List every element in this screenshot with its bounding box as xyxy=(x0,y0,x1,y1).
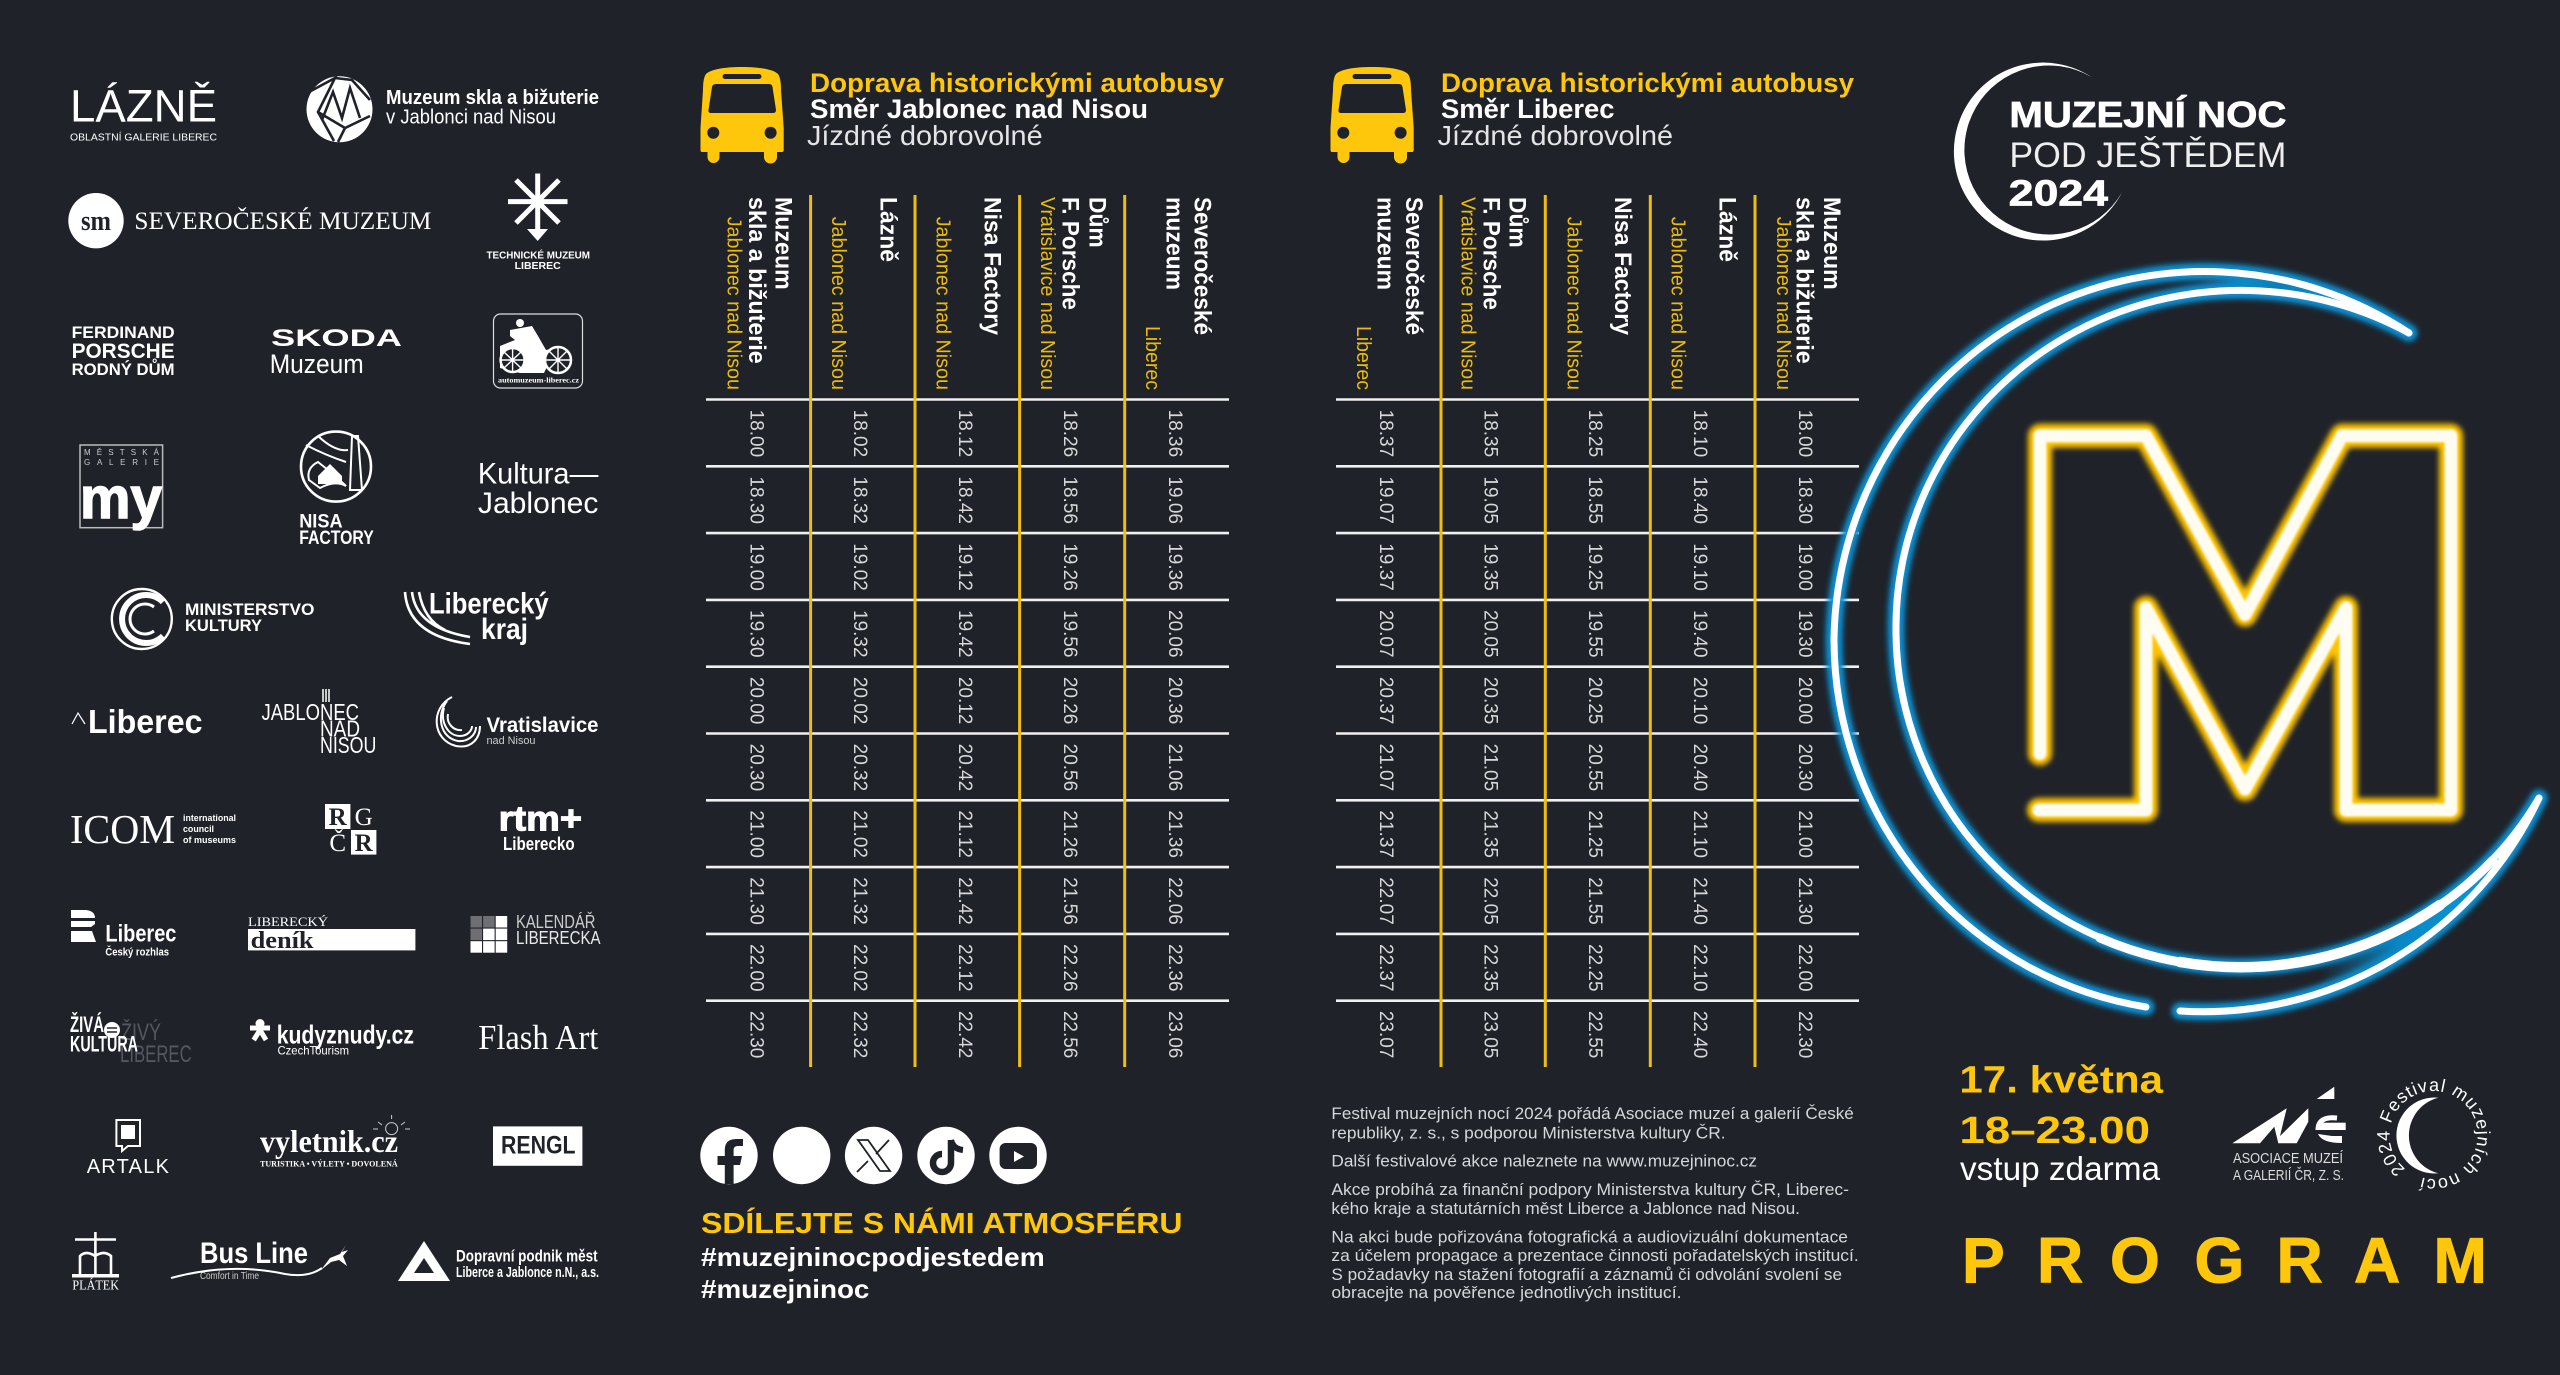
column headers: F. Porsche xyxy=(1056,197,1084,310)
departure times: 19.10 xyxy=(1689,543,1710,591)
departure times: 20.05 xyxy=(1480,610,1501,658)
departure times: 20.12 xyxy=(954,677,975,724)
logo: Bus Line: Bus Line xyxy=(200,1237,308,1270)
logo: Živá kultura, Živý Liberec xyxy=(70,1012,192,1068)
departure times: 22.06 xyxy=(1164,877,1185,925)
heading: direction Jablonec: Doprava historickými autobusy xyxy=(810,68,1224,98)
column headers: Lázně xyxy=(874,197,902,262)
text block: festival information: republiky, z. s., s podporou Ministerstva kultury ČR. xyxy=(1331,1123,1726,1142)
column headers: Jablonec nad Nisou xyxy=(1772,217,1794,390)
logo: kudyznudy.cz CzechTourism: kudyznudy.cz xyxy=(277,1020,414,1050)
logo: Automuzeum Liberec: automuzeum-liberec.cz xyxy=(498,376,580,384)
departure times: 22.55 xyxy=(1584,1011,1605,1058)
hashtags: #muzejninoc xyxy=(701,1274,869,1304)
departure times: 18.26 xyxy=(1059,410,1080,457)
departure times: 21.07 xyxy=(1375,744,1396,791)
logo: Bus Line xyxy=(171,1237,348,1282)
logo: Liberecký deník xyxy=(248,914,415,954)
departure times: 20.36 xyxy=(1164,677,1185,724)
departure times: 19.40 xyxy=(1689,610,1710,658)
column headers: Jablonec nad Nisou xyxy=(1562,217,1584,390)
departure times: 20.02 xyxy=(849,677,870,724)
logo: Plátek: PLÁTEK xyxy=(72,1276,119,1294)
logo: ICOM: ICOM xyxy=(70,806,175,852)
logo: Nisa Factory xyxy=(299,432,374,549)
departure times: 22.25 xyxy=(1584,944,1605,992)
column headers: Liberec xyxy=(1352,326,1374,390)
logo: Městská galerie MY: my xyxy=(80,466,162,531)
icon: TikTok xyxy=(917,1127,975,1184)
column headers: muzeum xyxy=(1372,197,1398,290)
panel: bus timetable towards Jablonec nad Nisou xyxy=(700,67,1229,1067)
heading: direction Jablonec xyxy=(807,68,1224,151)
logo: Český rozhlas Liberec xyxy=(71,910,176,959)
departure times: 18.00 xyxy=(745,410,766,457)
column headers: Vratislavice nad Nisou xyxy=(1456,197,1478,390)
departure times: 18.40 xyxy=(1689,476,1710,524)
departure times: 22.00 xyxy=(745,944,766,992)
logo: Technické muzeum Liberec: LIBEREC xyxy=(515,260,561,272)
logo: Kultura Jablonec xyxy=(478,458,598,520)
departure times: 18.55 xyxy=(1584,476,1605,524)
logo: ICOM: of museums xyxy=(183,835,236,846)
column headers: Dům xyxy=(1504,197,1530,248)
hashtags xyxy=(701,1242,1045,1304)
logo: RG ČR: R xyxy=(329,804,348,831)
logo: Jablonec nad Nisou: JABLONEC xyxy=(262,699,359,725)
departure times: 20.06 xyxy=(1164,610,1185,658)
heading: direction Jablonec: Směr Jablonec nad Nisou xyxy=(810,94,1148,124)
departure times: 21.32 xyxy=(849,877,870,925)
departure times: 19.55 xyxy=(1584,610,1605,658)
logo: Lázně: LÁZNĚ xyxy=(70,80,217,131)
departure times: 20.10 xyxy=(1689,677,1710,724)
neon letter M xyxy=(2039,436,2451,810)
hashtags: #muzejninocpodjestedem xyxy=(701,1242,1045,1272)
departure times: 20.35 xyxy=(1480,677,1501,724)
column headers: Muzeum xyxy=(770,197,796,290)
logo wordmark: 2024 xyxy=(2009,173,2108,214)
column headers: Jablonec nad Nisou xyxy=(1666,217,1688,390)
logo: Městská galerie MY: GALERIE xyxy=(84,458,159,467)
date and admission: 18–23.00 xyxy=(1959,1110,2150,1152)
departure times: 22.42 xyxy=(954,1011,975,1058)
logo: Asociace muzeí a galerií: ASOCIACE MUZEÍ xyxy=(2233,1150,2344,1167)
departure times: 21.26 xyxy=(1059,810,1080,858)
departure times: 18.30 xyxy=(745,476,766,524)
departure times: 18.37 xyxy=(1375,410,1396,457)
logo: Městská galerie MY: MĚSTSKÁ xyxy=(84,448,160,457)
logo wordmark: POD JEŠTĚDEM xyxy=(2009,136,2286,175)
departure times: 21.12 xyxy=(954,810,975,858)
logo: Rengl xyxy=(493,1126,582,1166)
neon crescent xyxy=(1834,267,2539,1012)
text block: festival information: za účelem propagace a prezentace činnosti pořadatelských institucí. xyxy=(1331,1247,1859,1265)
logo: Živá kultura, Živý Liberec: LIBEREC xyxy=(120,1041,192,1068)
logo: ICOM: council xyxy=(183,824,214,835)
text block: festival information: Festival muzejních nocí 2024 pořádá Asociace muzeí a galerií České xyxy=(1331,1104,1854,1123)
column headers: Severočeské xyxy=(1400,197,1427,335)
logo wordmark xyxy=(2009,94,2286,214)
departure times: 19.00 xyxy=(1794,543,1815,591)
text block: festival information: Na akci bude pořizována fotografická a audiovizuální dokumentace xyxy=(1331,1228,1848,1246)
departure times: 18.12 xyxy=(954,410,975,457)
departure times: 18.30 xyxy=(1794,476,1815,524)
logo: Technické muzeum Liberec xyxy=(486,174,590,272)
illustration: neon crescent and M xyxy=(1834,267,2539,1012)
logo: Lázně: OBLASTNÍ GALERIE LIBEREC xyxy=(70,130,217,144)
departure times: 20.07 xyxy=(1375,610,1396,658)
date and admission: vstup zdarma xyxy=(1960,1150,2161,1187)
column headers: Nisa Factory xyxy=(1609,197,1636,336)
logo: Český rozhlas Liberec: Liberec xyxy=(105,920,176,948)
logo: Kalendář Liberecka: LIBERECKA xyxy=(516,928,601,948)
logo: Bus Line: Comfort in Time xyxy=(200,1271,259,1282)
column headers: skla a bižuterie xyxy=(1790,197,1818,364)
date and admission: 17. května xyxy=(1959,1060,2164,1102)
departure times: 19.05 xyxy=(1480,476,1501,524)
departure times: 18.56 xyxy=(1059,476,1080,524)
logo: Severočeské muzeum: SEVEROČESKÉ MUZEUM xyxy=(134,207,431,235)
departure times: 21.30 xyxy=(1794,877,1815,925)
logo: Kalendář Liberecka xyxy=(470,912,601,953)
departure times: 20.56 xyxy=(1059,744,1080,791)
departure times: 19.37 xyxy=(1375,543,1396,591)
logo: Artalk xyxy=(87,1120,170,1178)
logo: Nisa Factory: NISA xyxy=(299,512,343,533)
departure times: 21.30 xyxy=(745,877,766,925)
departure times: 22.32 xyxy=(849,1011,870,1058)
logo: Jablonec nad Nisou: NAD xyxy=(320,716,360,742)
departure times: 21.05 xyxy=(1480,744,1501,791)
logo: Dopravní podnik měst Liberce a Jablonce: Liberce a Jablonce n.N., a.s. xyxy=(456,1265,599,1281)
departure times: 20.00 xyxy=(745,677,766,724)
heading: direction Liberec xyxy=(1438,68,1854,151)
departure times: 19.35 xyxy=(1480,543,1501,591)
departure times: 18.32 xyxy=(849,476,870,524)
departure times: 19.42 xyxy=(954,610,975,658)
departure times: 18.35 xyxy=(1480,410,1501,457)
departure times: 20.30 xyxy=(1794,744,1815,791)
departure times: 21.06 xyxy=(1164,744,1185,791)
logo: Ferdinand Porsche rodný dům: FERDINAND xyxy=(72,323,175,342)
logo: Liberecký deník: LIBERECKÝ xyxy=(248,914,329,929)
heading: direction Jablonec: Jízdné dobrovolné xyxy=(807,120,1043,151)
logo: ICOM xyxy=(70,806,236,852)
logo: Ministerstvo kultury: MINISTERSTVO xyxy=(185,600,314,619)
column headers: Severočeské xyxy=(1188,197,1216,335)
departure times: 18.00 xyxy=(1794,410,1815,457)
departure times: 18.25 xyxy=(1584,410,1605,457)
departure times: 22.02 xyxy=(849,944,870,992)
logo: rtm+ Liberecko: rtm+ xyxy=(499,800,582,839)
logo: Škoda muzeum: SKODA xyxy=(271,325,402,352)
departure times: 22.12 xyxy=(954,944,975,992)
logo wordmark: MUZEJNÍ NOC xyxy=(2009,94,2286,135)
heading: direction Liberec: Směr Liberec xyxy=(1441,94,1614,124)
logo: ICOM: international xyxy=(183,813,236,824)
departure times: 22.30 xyxy=(745,1011,766,1058)
logo: RG ČR xyxy=(325,804,376,857)
departure times: 23.05 xyxy=(1480,1011,1501,1058)
text block: festival information: S požadavky na stažení fotografií a záznamů či odvolání svolení se xyxy=(1331,1266,1842,1284)
departure times xyxy=(1375,410,1815,1058)
departure times: 22.40 xyxy=(1689,1011,1710,1058)
logo: Liberecký kraj: Liberecký xyxy=(429,588,549,621)
departure times: 21.10 xyxy=(1689,810,1710,858)
departure times: 20.40 xyxy=(1689,744,1710,791)
departure times: 20.00 xyxy=(1794,677,1815,724)
logo: Ministerstvo kultury: KULTURY xyxy=(185,616,263,635)
departure times: 18.10 xyxy=(1689,410,1710,457)
logo: Vratislavice nad Nisou: nad Nisou xyxy=(486,735,536,747)
logo: Flash Art: Flash Art xyxy=(478,1018,599,1057)
departure times: 21.42 xyxy=(954,877,975,925)
column headers: Liberec xyxy=(1141,326,1163,390)
logo: Severočeské muzeum: sm xyxy=(81,206,111,237)
icon: Instagram placeholder disc xyxy=(773,1127,830,1184)
logo: Škoda muzeum xyxy=(270,325,402,379)
logo: Živá kultura, Živý Liberec: KULTURA xyxy=(70,1031,138,1056)
logo: Ferdinand Porsche rodný dům xyxy=(72,323,175,379)
departure times: 19.32 xyxy=(849,610,870,658)
logo: kudyznudy.cz CzechTourism xyxy=(250,1019,414,1058)
column headers: Vratislavice nad Nisou xyxy=(1036,197,1058,390)
logo: Liberec city: Liberec xyxy=(88,703,202,740)
departure times: 20.26 xyxy=(1059,677,1080,724)
column headers: Jablonec nad Nisou xyxy=(722,217,744,390)
logo: vyletnik.cz: TURISTIKA • VÝLETY • DOVOLENÁ xyxy=(260,1159,398,1169)
logo: Muzeum skla a bižuterie xyxy=(306,76,599,142)
departure times: 22.37 xyxy=(1375,944,1396,992)
departure times: 22.10 xyxy=(1689,944,1710,992)
departure times: 18.42 xyxy=(954,476,975,524)
logo: vyletnik.cz: vyletnik.cz xyxy=(260,1123,398,1159)
departure times: 19.02 xyxy=(849,543,870,591)
departure times: 21.36 xyxy=(1164,810,1185,858)
column headers: Nisa Factory xyxy=(978,197,1006,336)
logo: Ferdinand Porsche rodný dům: RODNÝ DŮM xyxy=(72,359,175,379)
column headers: Jablonec nad Nisou xyxy=(827,217,849,390)
logo: RG ČR: Č xyxy=(329,829,346,857)
logo: Kultura Jablonec: Jablonec xyxy=(478,487,598,520)
departure times: 19.30 xyxy=(1794,610,1815,658)
departure times xyxy=(745,410,1185,1058)
column headers: F. Porsche xyxy=(1478,197,1504,310)
column headers: muzeum xyxy=(1160,197,1188,290)
departure times: 20.32 xyxy=(849,744,870,791)
crescent xyxy=(1954,63,2122,241)
logo: kudyznudy.cz CzechTourism: CzechTourism xyxy=(278,1044,349,1058)
departure times: 20.55 xyxy=(1584,744,1605,791)
departure times: 21.56 xyxy=(1059,877,1080,925)
departure times: 19.36 xyxy=(1164,543,1185,591)
logo: Nisa Factory: FACTORY xyxy=(299,528,374,549)
logo: Živá kultura, Živý Liberec: ŽIVÁ xyxy=(70,1012,104,1037)
logo: Ministerstvo kultury xyxy=(112,589,314,649)
column headers: Dům xyxy=(1084,197,1110,248)
logo: Asociace muzeí a galerií xyxy=(2232,1087,2346,1184)
departure times: 20.37 xyxy=(1375,677,1396,724)
logo: Ferdinand Porsche rodný dům: PORSCHE xyxy=(72,340,175,363)
column headers: Muzeum xyxy=(1818,197,1845,290)
heading: direction Liberec: Doprava historickými autobusy xyxy=(1441,68,1854,98)
logo: RG ČR: R xyxy=(355,830,374,857)
logo: Kalendář Liberecka: KALENDÁŘ xyxy=(516,912,595,932)
logo: Živá kultura, Živý Liberec: ŽIVÝ xyxy=(121,1019,161,1046)
logo: Liberecký kraj xyxy=(405,588,549,646)
icon: Facebook xyxy=(700,1127,758,1184)
logo: Dopravní podnik měst Liberce a Jablonce: Dopravní podnik měst xyxy=(456,1246,598,1266)
logo: Vratislavice nad Nisou: Vratislavice xyxy=(486,714,598,737)
heading: share the atmosphere: SDÍLEJTE S NÁMI ATMOSFÉRU xyxy=(701,1206,1182,1240)
departure times: 21.35 xyxy=(1480,810,1501,858)
logo: Asociace muzeí a galerií: A GALERIÍ ČR, Z. S. xyxy=(2233,1167,2344,1184)
departure times: 21.02 xyxy=(849,810,870,858)
departure times: 19.26 xyxy=(1059,543,1080,591)
text block: festival information: Další festivalové akce naleznete na www.muzejninoc.cz xyxy=(1331,1153,1757,1171)
icon: YouTube xyxy=(989,1127,1047,1184)
logo: Muzejní noc pod Ještědem 2024 xyxy=(1954,63,2286,241)
title: PROGRAM: PROGRAM xyxy=(1962,1225,2487,1297)
departure times: 23.06 xyxy=(1164,1011,1185,1058)
departure times: 19.25 xyxy=(1584,543,1605,591)
timetable grid lines xyxy=(706,195,1229,1067)
departure times: 21.37 xyxy=(1375,810,1396,858)
departure times: 19.00 xyxy=(745,543,766,591)
text block: festival information xyxy=(1331,1104,1859,1302)
logo: RG ČR: G xyxy=(355,804,373,831)
departure times: 21.25 xyxy=(1584,810,1605,858)
logo: Jablonec nad Nisou: NISOU xyxy=(320,732,376,758)
logo: Jablonec nad Nisou xyxy=(262,689,376,758)
departure times: 19.07 xyxy=(1375,476,1396,524)
panel: social media xyxy=(700,1127,1182,1304)
icon: yellow bus xyxy=(700,67,784,164)
logo: Dopravní podnik měst Liberce a Jablonce xyxy=(398,1241,599,1281)
logo: Muzeum skla a bižuterie: v Jablonci nad Nisou xyxy=(386,107,556,129)
logo: Muzeum skla a bižuterie: Muzeum skla a bižuterie xyxy=(386,87,599,109)
logo: Škoda muzeum: Muzeum xyxy=(270,349,364,379)
logo: Vratislavice nad Nisou xyxy=(437,697,598,747)
logo: Liberecký deník: deník xyxy=(251,928,314,954)
timetable grid lines xyxy=(1336,195,1859,1067)
departure times: 19.06 xyxy=(1164,476,1185,524)
departure times: 19.12 xyxy=(954,543,975,591)
departure times: 20.30 xyxy=(745,744,766,791)
text block: festival information: obracejte na pověřence jednotlivých institucí. xyxy=(1331,1284,1682,1302)
departure times: 22.26 xyxy=(1059,944,1080,992)
logo: vyletnik.cz xyxy=(260,1115,410,1169)
departure times: 20.25 xyxy=(1584,677,1605,724)
logo: Technické muzeum Liberec: TECHNICKÉ MUZEUM xyxy=(486,248,590,262)
panel: bus timetable towards Liberec xyxy=(1330,67,1859,1067)
departure times: 22.30 xyxy=(1794,1011,1815,1058)
departure times: 18.02 xyxy=(849,410,870,457)
column headers: skla a bižuterie xyxy=(743,197,770,364)
departure times: 21.00 xyxy=(1794,810,1815,858)
departure times: 20.42 xyxy=(954,744,975,791)
departure times: 19.56 xyxy=(1059,610,1080,658)
logo: Kultura Jablonec: Kultura— xyxy=(478,458,598,490)
logo: Rengl: RENGL xyxy=(501,1131,576,1159)
departure times: 22.35 xyxy=(1480,944,1501,992)
text block: festival information: Akce probíhá za finanční podpory Ministerstva kultury ČR, Liberec- xyxy=(1331,1180,1849,1199)
departure times: 18.36 xyxy=(1164,410,1185,457)
column headers xyxy=(722,197,1216,390)
departure times: 19.30 xyxy=(745,610,766,658)
logo: Plátek xyxy=(72,1232,119,1294)
panel: partner logos xyxy=(68,76,601,1293)
departure times: 22.05 xyxy=(1480,877,1501,925)
logo: Český rozhlas Liberec: Český rozhlas xyxy=(105,946,169,959)
departure times: 22.07 xyxy=(1375,877,1396,925)
departure times: 22.36 xyxy=(1164,944,1185,992)
column headers xyxy=(1352,197,1845,390)
departure times: 21.55 xyxy=(1584,877,1605,925)
logo: Festival muzejních nocí 2024: 2024 Festival muzejních nocí xyxy=(2377,1078,2491,1191)
column headers: Lázně xyxy=(1714,197,1740,262)
column headers: Jablonec nad Nisou xyxy=(932,217,954,390)
departure times: 21.40 xyxy=(1689,877,1710,925)
logo: rtm+ Liberecko: Liberecko xyxy=(503,834,575,854)
icon: X xyxy=(845,1127,902,1184)
date and admission xyxy=(1959,1060,2164,1187)
logo: Liberecký kraj: kraj xyxy=(481,613,528,646)
departure times: 23.07 xyxy=(1375,1011,1396,1058)
heading: direction Liberec: Jízdné dobrovolné xyxy=(1438,120,1673,151)
logo: Automuzeum Liberec xyxy=(494,314,582,388)
logo: rtm+ Liberecko xyxy=(499,800,582,854)
logo: Artalk: ARTALK xyxy=(87,1156,170,1178)
departure times: 22.00 xyxy=(1794,944,1815,992)
text block: festival information: kého kraje a statutárních měst Liberce a Jablonce nad Nisou. xyxy=(1331,1200,1800,1218)
departure times: 22.56 xyxy=(1059,1011,1080,1058)
departure times: 21.00 xyxy=(745,810,766,858)
icon: yellow bus xyxy=(1330,67,1414,164)
logo: Severočeské muzeum xyxy=(68,193,431,248)
